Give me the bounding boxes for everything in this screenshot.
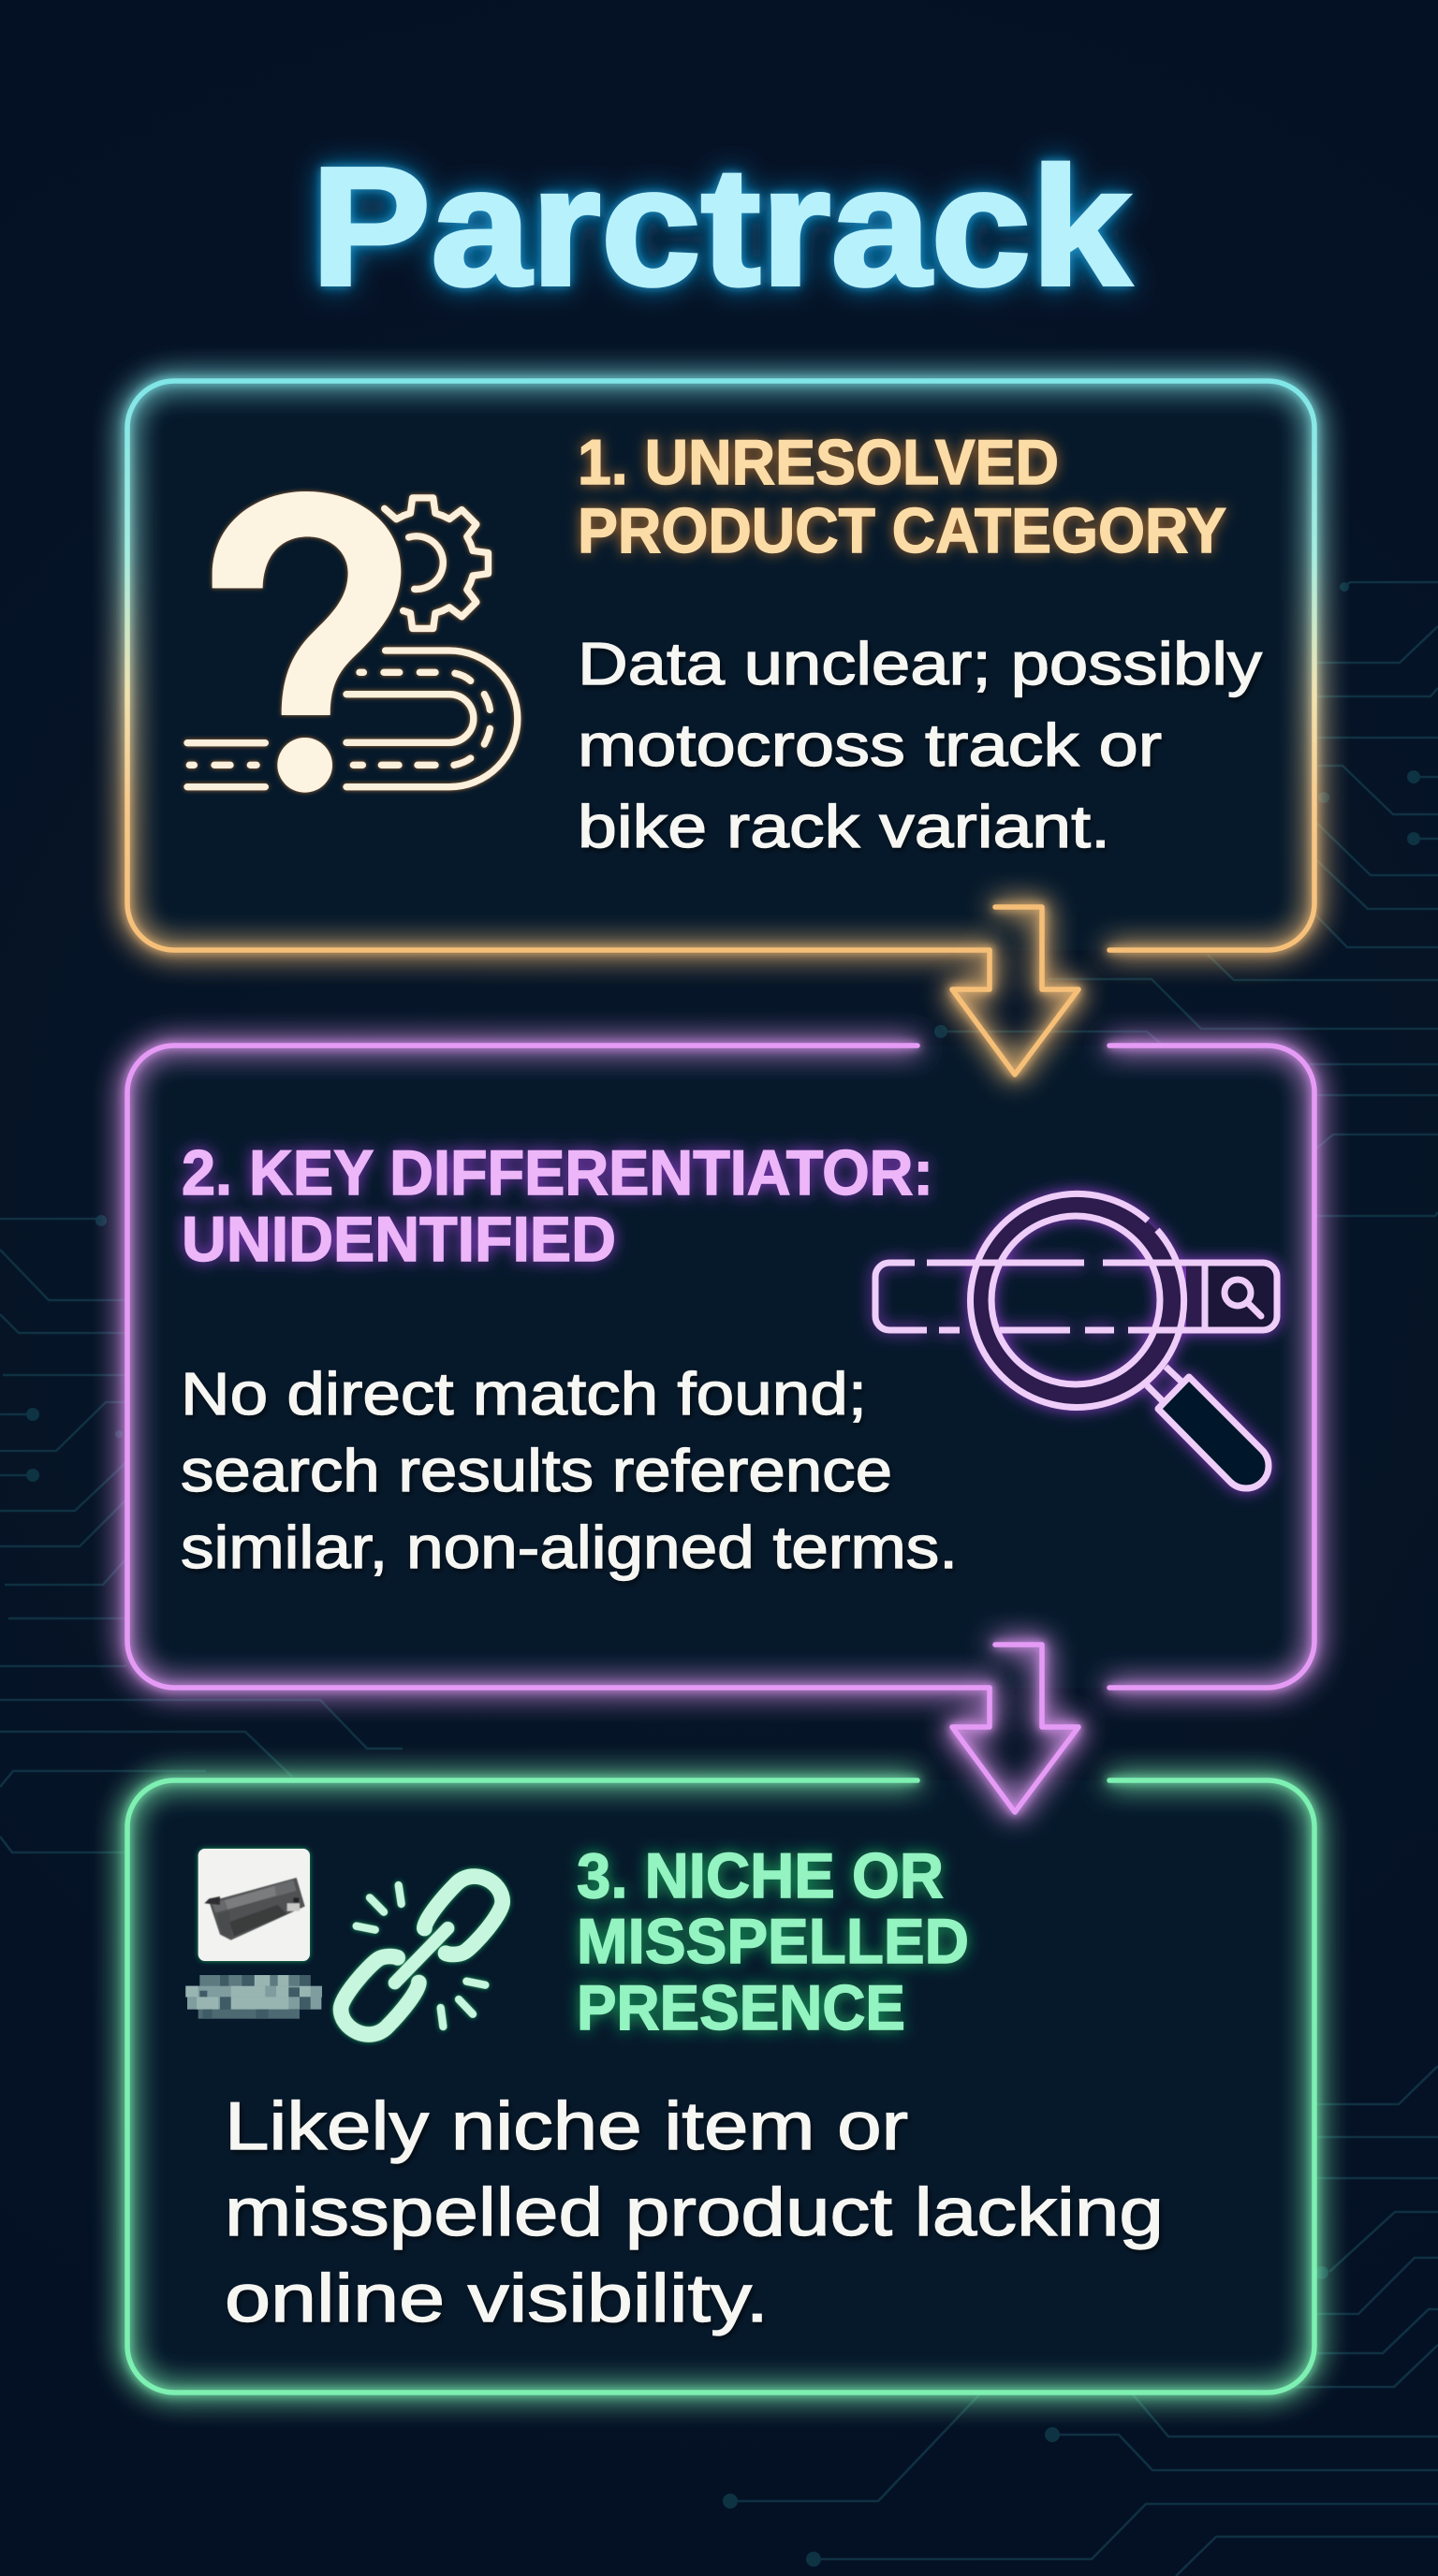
panel 3 border (127, 1780, 1314, 2393)
panel 3 heading: MISSPELLED (577, 1906, 969, 1977)
icon: product thumbnail (198, 1849, 310, 1961)
panel 3 body text: online visibility. (225, 2261, 769, 2336)
panel 3 heading: PRESENCE (577, 1972, 905, 2043)
question mark dot (277, 738, 332, 793)
panel 1 border (127, 381, 1314, 950)
panel 3 heading (577, 1840, 969, 2043)
panel 1 body text (578, 630, 1262, 860)
panel 3: niche or misspelled presence (127, 1780, 1314, 2393)
icon: search bar and magnifying glass (875, 1193, 1280, 1488)
panel 1 heading (578, 427, 1226, 566)
panel 3 body text: Likely niche item or (225, 2089, 908, 2164)
title: Parctrack (311, 133, 1132, 321)
panel 2 body text: search results reference (181, 1437, 892, 1504)
panel 3 body text (225, 2089, 1164, 2336)
panel 1 body text: Data unclear; possibly (578, 630, 1262, 697)
panel 2 heading: UNIDENTIFIED (182, 1204, 616, 1275)
circuit board background pattern (0, 582, 1438, 2576)
panel 1 heading: PRODUCT CATEGORY (578, 495, 1226, 566)
icon: broken chain link (341, 1877, 503, 2034)
panel 2 body text: similar, non-aligned terms. (181, 1514, 958, 1581)
panel 2: key differentiator unidentified (127, 1046, 1314, 1688)
panel 3 body text: misspelled product lacking (225, 2175, 1164, 2250)
panel 1: unresolved product category (127, 381, 1314, 950)
arrow: panel 1 to panel 2 (952, 907, 1078, 1075)
blurred pixelated product label (185, 1975, 322, 2019)
panel 1 heading: 1. UNRESOLVED (578, 427, 1059, 498)
panel 2 heading: 2. KEY DIFFERENTIATOR: (182, 1137, 933, 1208)
arrow: panel 2 to panel 3 (952, 1645, 1078, 1812)
panel 1 body text: bike rack variant. (578, 793, 1110, 860)
panel 2 body text (181, 1360, 958, 1581)
panel 1 body text: motocross track or (578, 711, 1162, 779)
panel 2 heading (182, 1137, 933, 1275)
panel 3 heading: 3. NICHE OR (577, 1840, 944, 1911)
panel 2 border (127, 1046, 1314, 1688)
icon: question mark, gear and track (187, 491, 518, 793)
panel 2 body text: No direct match found; (181, 1360, 867, 1427)
